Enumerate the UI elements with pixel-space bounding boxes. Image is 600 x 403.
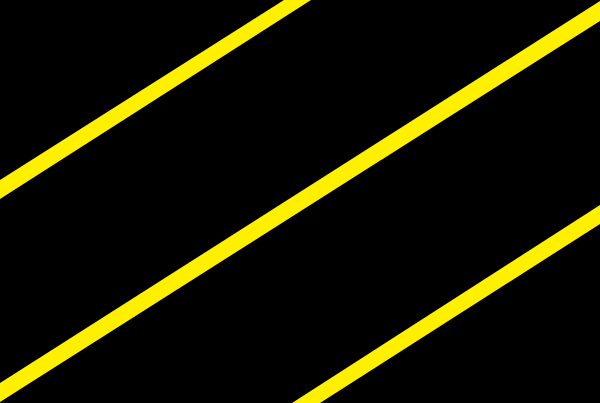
stripe: lower right yellow diagonal (292, 205, 600, 403)
stripe: upper left yellow diagonal (0, 0, 311, 199)
